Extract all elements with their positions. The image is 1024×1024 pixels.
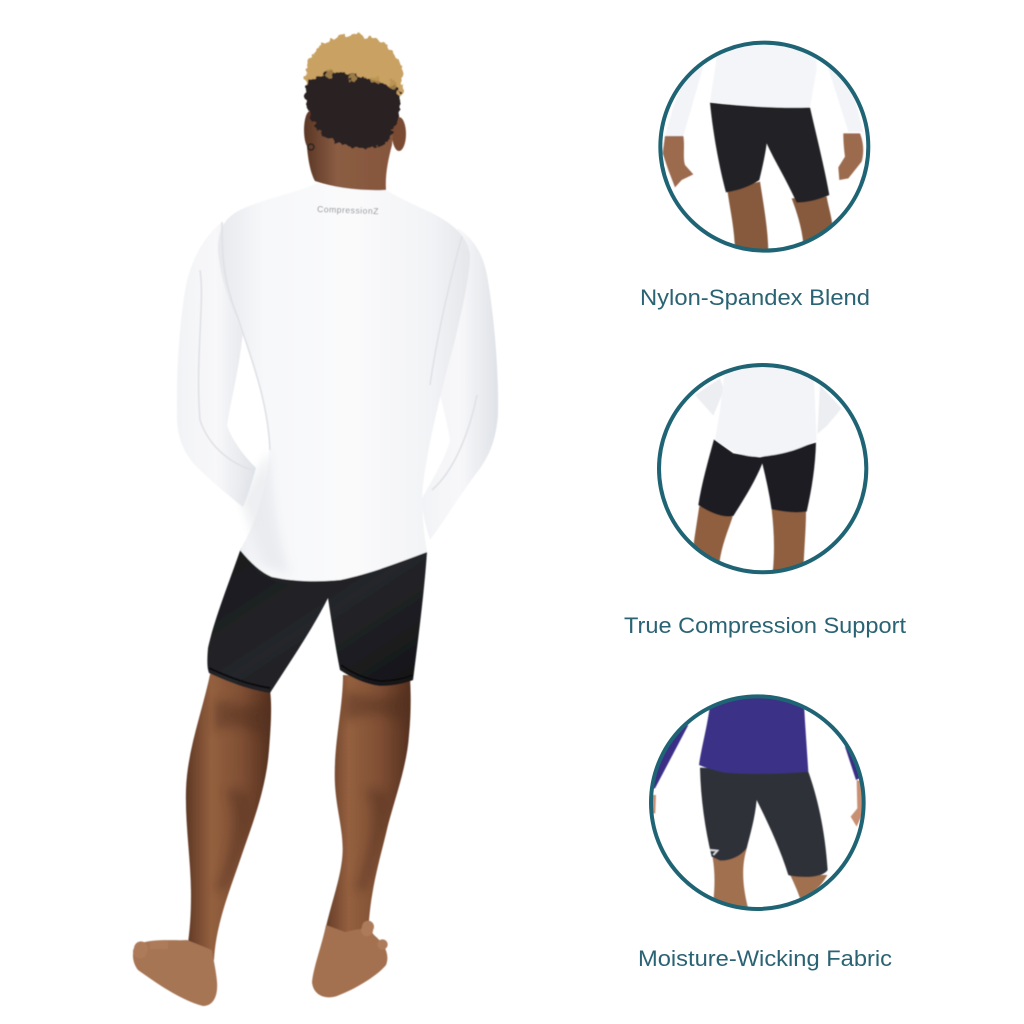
feature circle: moisture-wicking fabric <box>647 692 867 912</box>
shirt shading <box>240 450 290 575</box>
right arm sleeve <box>421 228 498 540</box>
skin: legs <box>727 182 833 253</box>
blonde hair tips <box>306 36 403 100</box>
right ear <box>392 117 406 151</box>
sleeves <box>665 60 863 136</box>
label: true compression support: True Compression Support <box>624 613 906 638</box>
circle ring <box>651 696 864 909</box>
shirt <box>715 363 817 457</box>
sleeves <box>695 378 842 434</box>
label: nylon-spandex blend: Nylon-Spandex Blend <box>640 285 870 310</box>
model figure wearing shirt and shorts <box>133 36 498 1006</box>
left foot <box>133 940 217 1006</box>
shirt seams <box>199 222 477 490</box>
feature circle: nylon-spandex blend <box>660 37 868 253</box>
blonde flecks <box>326 70 396 88</box>
left ear <box>304 111 316 149</box>
circle ring <box>659 365 866 572</box>
circle ring <box>660 43 868 251</box>
shorts <box>698 439 816 516</box>
dark hair <box>305 72 400 148</box>
right foot toes <box>361 921 388 950</box>
shirt <box>699 692 808 774</box>
left foot toes <box>133 941 168 959</box>
skin: legs <box>713 849 827 912</box>
skin: legs <box>693 506 806 573</box>
leg muscle shading <box>215 690 408 890</box>
shirt torso <box>218 183 470 581</box>
neck <box>306 110 395 190</box>
left arm sleeve <box>177 222 256 507</box>
shorts <box>710 103 829 203</box>
sleeves <box>647 725 867 788</box>
skin: hands <box>663 133 863 187</box>
shorts <box>207 548 427 693</box>
feature circle: true compression support <box>659 363 866 573</box>
skin: hands <box>650 780 863 827</box>
shorts logo <box>710 850 717 855</box>
shirt logo text: CompressionZ <box>317 204 379 216</box>
right leg <box>322 675 411 945</box>
label: moisture-wicking fabric: Moisture-Wicking Fabric <box>638 946 892 971</box>
earring <box>308 144 314 150</box>
shirt <box>710 45 816 108</box>
shorts <box>700 768 828 877</box>
infographic canvas <box>132 32 906 1007</box>
right foot <box>312 925 387 997</box>
left leg <box>186 670 271 960</box>
